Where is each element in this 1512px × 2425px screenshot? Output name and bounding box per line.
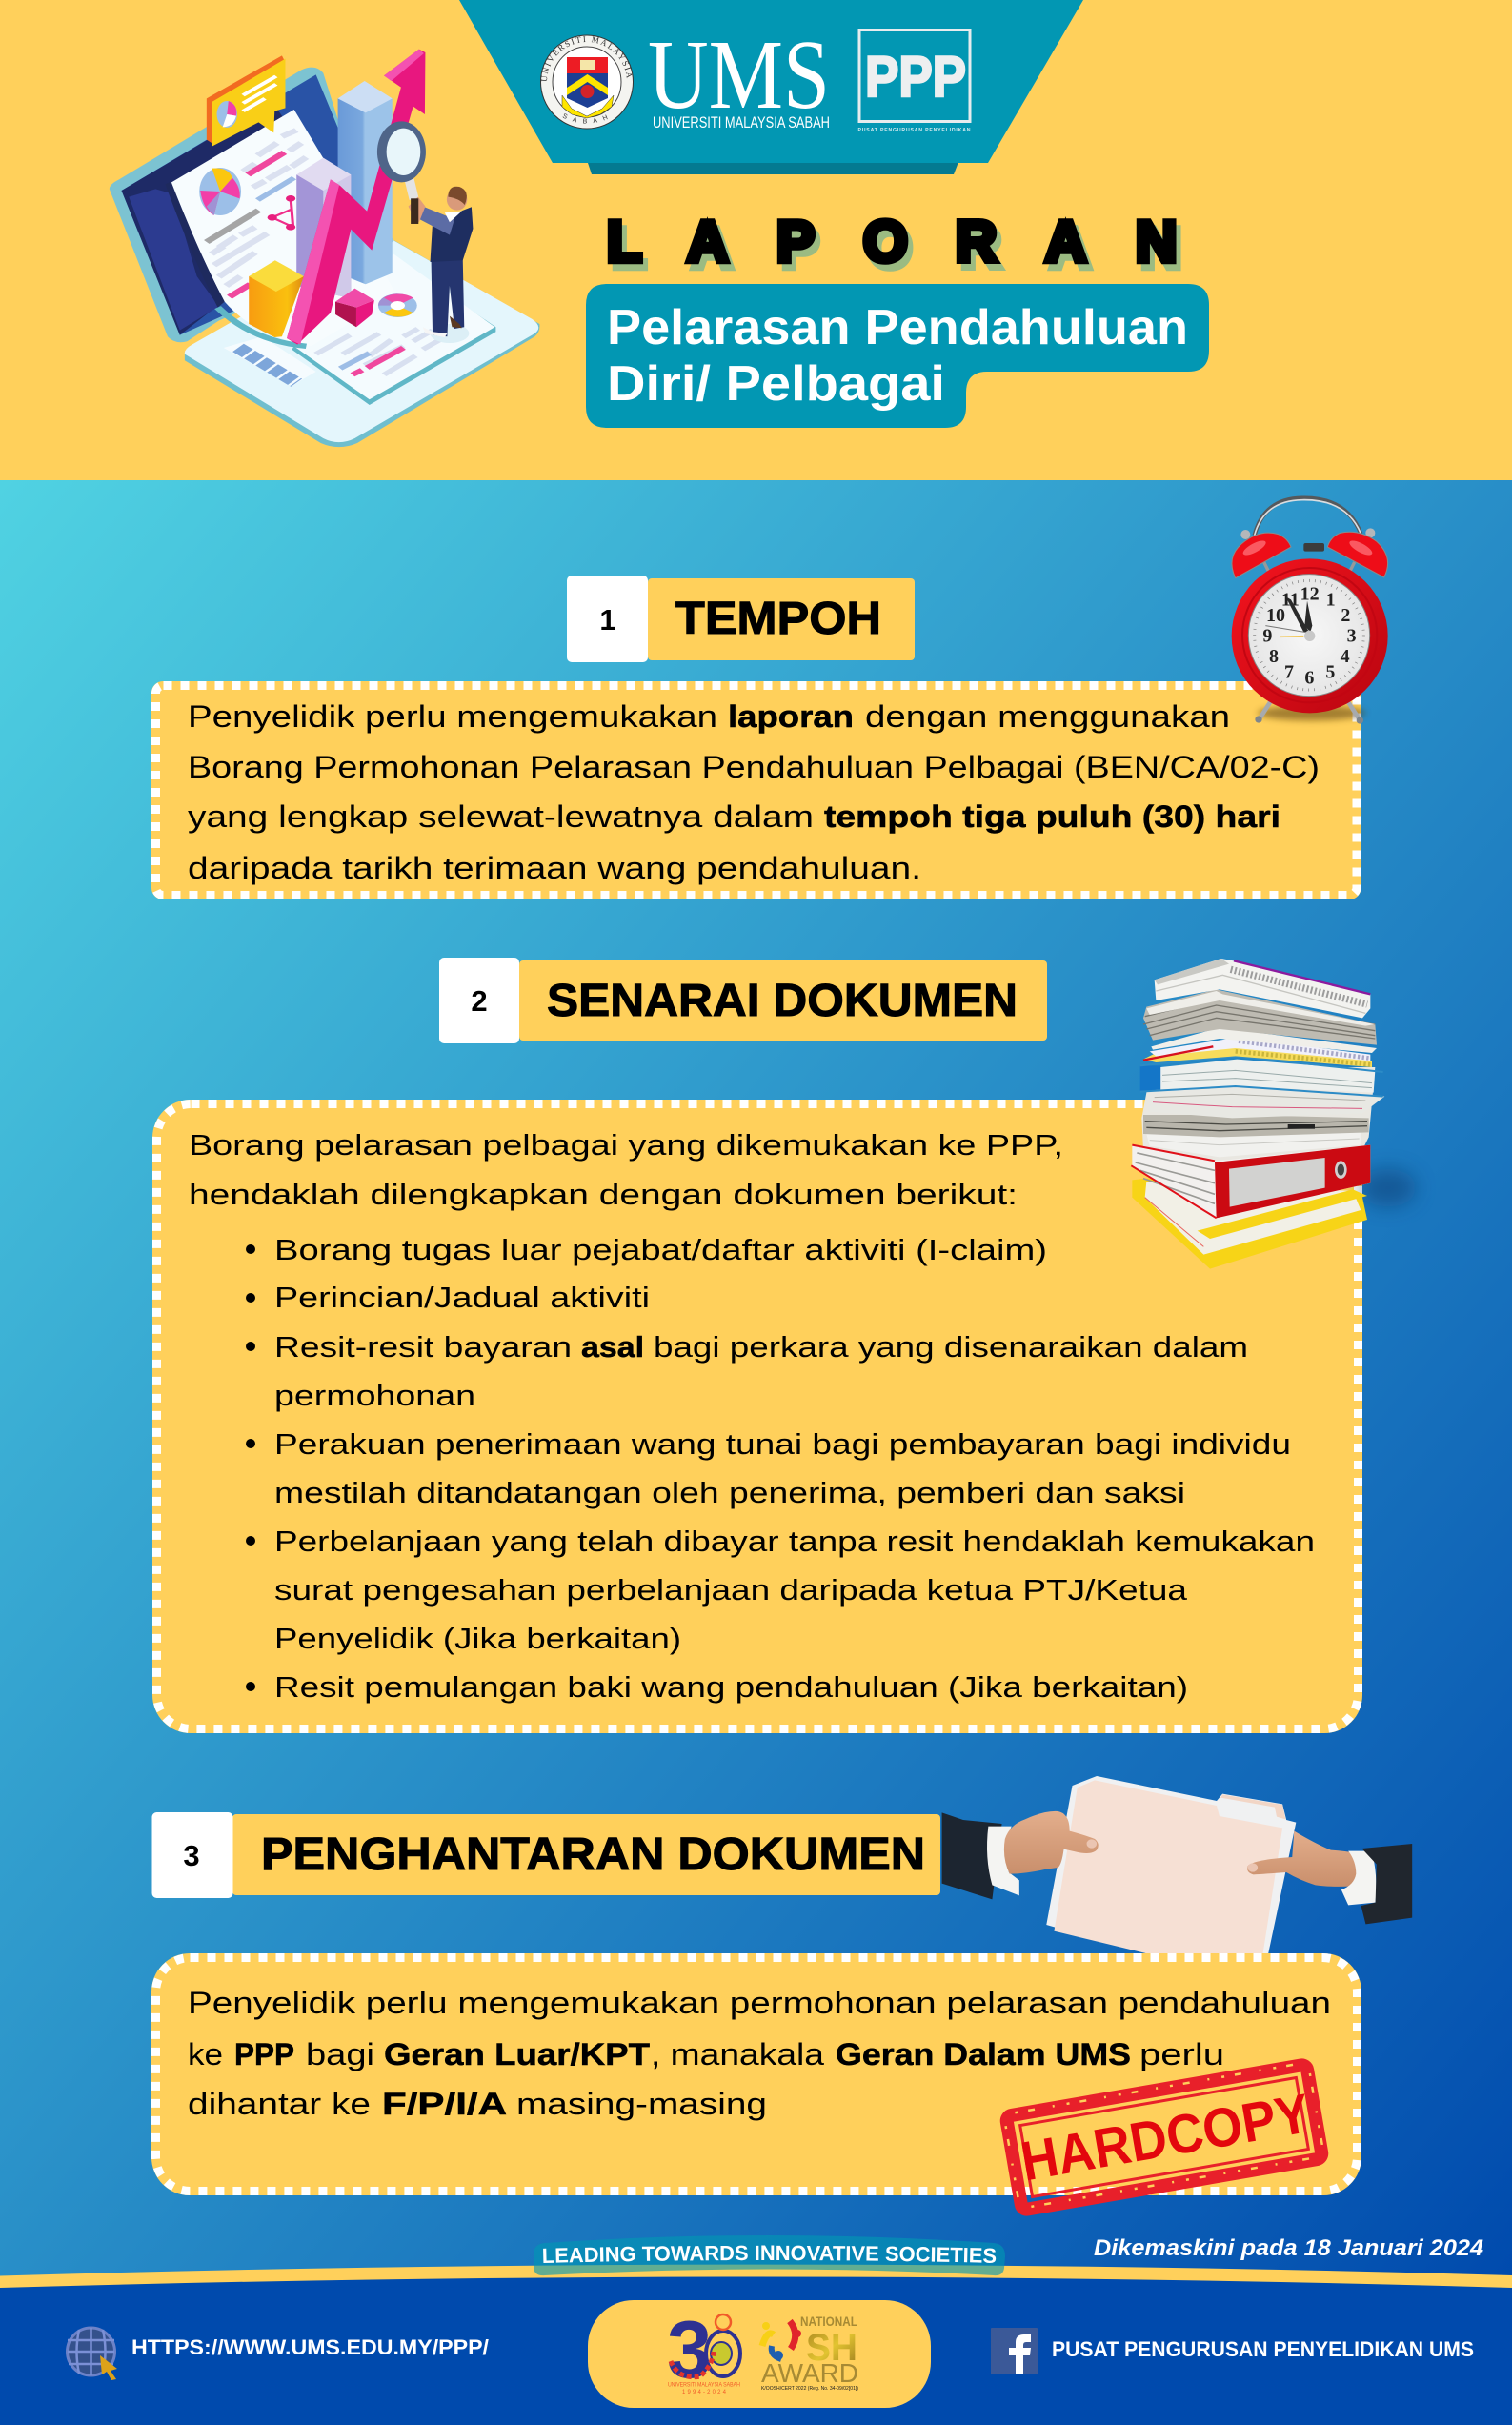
icon: globe with cursor xyxy=(67,2328,117,2380)
stack shadow xyxy=(1360,1169,1417,1207)
blue binder xyxy=(1140,1065,1160,1092)
panel 1: tempoh text: daripada tarikh terimaan wang pendahuluan. xyxy=(188,851,921,885)
laptop screen xyxy=(110,68,393,342)
logo: UMS seal: UNIVERSITI MALAYSIA xyxy=(541,36,633,82)
logo: UMS seal xyxy=(540,34,634,130)
tall blue bar xyxy=(338,98,393,284)
panel 3: penghantaran dokumen: ke xyxy=(188,2037,223,2071)
icon: facebook xyxy=(991,2328,1038,2374)
logo: UMS 30 years: 3 xyxy=(667,2305,712,2395)
clock numbers xyxy=(1262,583,1357,689)
panel 3: penghantaran dokumen: perlu xyxy=(1139,2037,1224,2071)
panel 1: tempoh text: laporan xyxy=(728,699,854,734)
stamp outer frame xyxy=(1006,2064,1322,2211)
subtitle pill: Diri/ Pelbagai xyxy=(607,356,945,412)
bells xyxy=(1232,533,1291,578)
heading 1: TEMPOH xyxy=(567,576,915,662)
heading 3: PENGHANTARAN DOKUMEN: PENGHANTARAN DOKUMEN xyxy=(261,1829,925,1880)
banner trapezoid xyxy=(459,0,1083,163)
illustration: data analysis laptop xyxy=(110,50,539,447)
heading 2: SENARAI DOKUMEN: 2 xyxy=(471,984,488,1018)
bullet list: Penyelidik (Jika berkaitan) xyxy=(274,1622,681,1655)
person xyxy=(409,187,473,343)
clock handle xyxy=(1255,498,1361,536)
clock numbers: 4 xyxy=(1341,646,1350,667)
heading 2: SENARAI DOKUMEN: SENARAI DOKUMEN xyxy=(547,976,1018,1026)
intro text: hendaklah dilengkapkan dengan dokumen berikut: xyxy=(189,1178,1018,1211)
icon: stack of files xyxy=(1131,959,1417,1269)
panel 2: senarai dokumen xyxy=(152,1100,1362,1733)
clock numbers: 10 xyxy=(1266,605,1285,626)
panel 3: penghantaran dokumen: bagi xyxy=(306,2037,374,2071)
right sleeve xyxy=(1361,1844,1412,1924)
folder back sheet xyxy=(1046,1776,1296,1960)
heading 1: TEMPOH: 1 xyxy=(599,603,616,637)
subtitle pill: Pelarasan Pendahuluan xyxy=(607,300,1188,355)
logo: UMS wordmark: UMS xyxy=(648,20,830,130)
panel 3: penghantaran dokumen: masing-masing xyxy=(516,2087,767,2121)
small pink cube xyxy=(335,302,356,327)
logo: UMS 30 years: 1994-2024 xyxy=(682,2390,727,2395)
folder front xyxy=(1054,1780,1282,1960)
bullet list: permohonan xyxy=(274,1379,475,1412)
clock numbers: 2 xyxy=(1341,605,1350,626)
clock shadow xyxy=(1258,705,1365,720)
logo: UMS 30 years: UNIVERSITI MALAYSIA SABAH xyxy=(668,2382,740,2388)
legs xyxy=(1260,702,1360,720)
middle papers xyxy=(1146,1132,1361,1157)
logo: national OSH award: SH xyxy=(806,2327,857,2369)
bullet list: Resit-resit bayaran xyxy=(274,1330,572,1364)
title: LAPORAN: LAPORAN xyxy=(607,210,1177,273)
left sleeve xyxy=(942,1812,1002,1899)
panel 3: penghantaran dokumen: PPP xyxy=(234,2037,294,2071)
clock numbers: 7 xyxy=(1284,662,1294,683)
logo: UMS seal: SABAH xyxy=(562,113,608,124)
logo banner xyxy=(459,0,1083,174)
logo: national OSH award xyxy=(761,2314,858,2392)
subtitle pill xyxy=(586,284,1209,428)
panel 1: tempoh text: yang lengkap selewat-lewatnya dalam xyxy=(188,799,814,834)
logo: PPP xyxy=(857,30,971,133)
stack core xyxy=(1141,1067,1375,1162)
grey folders xyxy=(1151,1027,1377,1053)
logo: PPP: PUSAT PENGURUSAN PENYELIDIKAN xyxy=(857,128,971,133)
right cuff xyxy=(1341,1851,1376,1905)
bullet list: asal xyxy=(581,1330,644,1364)
main gradient background xyxy=(0,480,1512,2288)
tagline ribbon: LEADING TOWARDS INNOVATIVE SOCIETIES xyxy=(543,2245,997,2263)
panel 3: penghantaran dokumen: dihantar ke xyxy=(188,2087,371,2121)
logo: national OSH award: K/OOSH/CERT 2022 (Reg. No. 34-09/02[01]) xyxy=(761,2386,858,2392)
donut chart xyxy=(378,293,417,317)
bullet list: surat pengesahan perbelanjaan daripada ketua PTJ/Ketua xyxy=(274,1573,1188,1607)
intro text: Borang pelarasan pelbagai yang dikemukakan ke PPP, xyxy=(189,1128,1063,1162)
paper sheet xyxy=(171,110,396,346)
stamp inner frame xyxy=(1020,2078,1308,2196)
logo: UMS 30 years xyxy=(667,2305,740,2395)
stamp: HARDCOPY xyxy=(1004,2062,1324,2211)
clock body xyxy=(1232,558,1388,713)
header background xyxy=(0,0,1512,480)
intro text xyxy=(189,1128,1063,1211)
panel 3: penghantaran dokumen: Geran Dalam UMS xyxy=(836,2037,1131,2071)
panel 1: tempoh text: dengan menggunakan xyxy=(865,699,1230,734)
footer stripe xyxy=(0,2265,1512,2288)
bullet list: mestilah ditandatangan oleh penerima, pemberi dan saksi xyxy=(274,1476,1185,1509)
panel 1: tempoh text: Penyelidik perlu mengemukakan xyxy=(188,699,717,734)
logo: national OSH award: NATIONAL xyxy=(800,2314,857,2329)
panel 3: penghantaran dokumen: F/P/I/A xyxy=(382,2087,507,2121)
left hand xyxy=(1004,1811,1099,1874)
icon: hands passing folder xyxy=(942,1776,1412,1960)
icon: alarm clock xyxy=(1232,498,1388,724)
pie chart on paper xyxy=(199,168,241,215)
heading 2: SENARAI DOKUMEN xyxy=(439,958,1047,1043)
paper rows xyxy=(207,131,306,286)
clock numbers: 9 xyxy=(1262,625,1272,646)
logo: PPP: PPP xyxy=(865,45,966,109)
bullet list: Resit pemulangan baki wang pendahuluan (Jika berkaitan) xyxy=(274,1670,1188,1704)
clock numbers: 3 xyxy=(1347,625,1357,646)
panel 3: penghantaran dokumen: , manakala xyxy=(651,2037,824,2071)
panel 3: penghantaran dokumen: Penyelidik perlu mengemukakan permohonan pelarasan pendahuluan xyxy=(188,1986,1331,2020)
bullet list: bagi perkara yang disenaraikan dalam xyxy=(654,1330,1248,1364)
clock numbers: 6 xyxy=(1304,668,1314,689)
network icon xyxy=(272,198,293,227)
panel 1: tempoh text xyxy=(151,681,1361,899)
panel 1: tempoh text: Borang Permohonan Pelarasan Pendahuluan Pelbagai (BEN/CA/02-C) xyxy=(188,750,1320,784)
bullet list: Perincian/Jadual aktiviti xyxy=(274,1281,650,1314)
logo: national OSH award: AWARD xyxy=(761,2358,858,2388)
logo pill xyxy=(588,2300,931,2408)
clock numbers: 5 xyxy=(1325,662,1335,683)
laptop base xyxy=(185,232,539,447)
sheet rows xyxy=(316,329,440,374)
footer band xyxy=(0,2272,1512,2425)
bullet list xyxy=(246,1233,1315,1704)
website text: HTTPS://WWW.UMS.EDU.MY/PPP/ xyxy=(131,2335,489,2359)
tagline ribbon xyxy=(534,2235,1005,2275)
stamp worn texture xyxy=(1004,2062,1324,2209)
hammer xyxy=(1303,543,1324,552)
heading 3: PENGHANTARAN DOKUMEN: 3 xyxy=(183,1839,200,1872)
yellow bar xyxy=(249,276,304,337)
clock hands xyxy=(1285,596,1309,632)
clock numbers: 11 xyxy=(1281,590,1300,611)
title: LAPORAN: LAPORAN xyxy=(612,216,1181,280)
top notebook xyxy=(1155,959,1370,1018)
bottom yellow folder xyxy=(1132,1179,1367,1269)
spiral notebook xyxy=(1143,1041,1372,1067)
bullet list: Perakuan penerimaan wang tunai bagi pembayaran bagi individu xyxy=(274,1427,1291,1461)
speech bubble xyxy=(207,55,285,146)
clock numbers: 8 xyxy=(1269,646,1279,667)
clock numbers: 1 xyxy=(1326,590,1336,611)
clock face xyxy=(1248,575,1370,697)
stamp text: HARDCOPY xyxy=(1017,2082,1314,2193)
bullet list: Borang tugas luar pejabat/daftar aktiviti (I-claim) xyxy=(274,1233,1047,1266)
updated date: Dikemaskini pada 18 Januari 2024 xyxy=(1094,2235,1483,2261)
banner shadow xyxy=(586,157,960,174)
bullet list: Perbelanjaan yang telah dibayar tanpa resit hendaklah kemukakan xyxy=(274,1525,1315,1558)
heading 3: PENGHANTARAN DOKUMEN xyxy=(152,1812,940,1898)
magnifying glass xyxy=(377,121,426,199)
panel 1: tempoh text: tempoh tiga puluh (30) hari xyxy=(824,799,1280,834)
data sheet on base xyxy=(292,257,495,405)
purple bar xyxy=(296,174,351,298)
red binder xyxy=(1132,1145,1370,1218)
right hand xyxy=(1247,1831,1358,1887)
facebook page text: PUSAT PENGURUSAN PENYELIDIKAN UMS xyxy=(1052,2337,1474,2361)
left cuff xyxy=(987,1827,1019,1895)
pink rising arrow xyxy=(287,50,425,345)
keyboard keys xyxy=(238,348,296,383)
heading 1: TEMPOH: TEMPOH xyxy=(675,594,881,644)
clock numbers: 12 xyxy=(1300,583,1320,604)
logo: UMS wordmark: UNIVERSITI MALAYSIA SABAH xyxy=(653,114,830,131)
panel 3: penghantaran dokumen: Geran Luar/KPT xyxy=(384,2037,651,2071)
panel 3: penghantaran dokumen xyxy=(151,1953,1361,2195)
